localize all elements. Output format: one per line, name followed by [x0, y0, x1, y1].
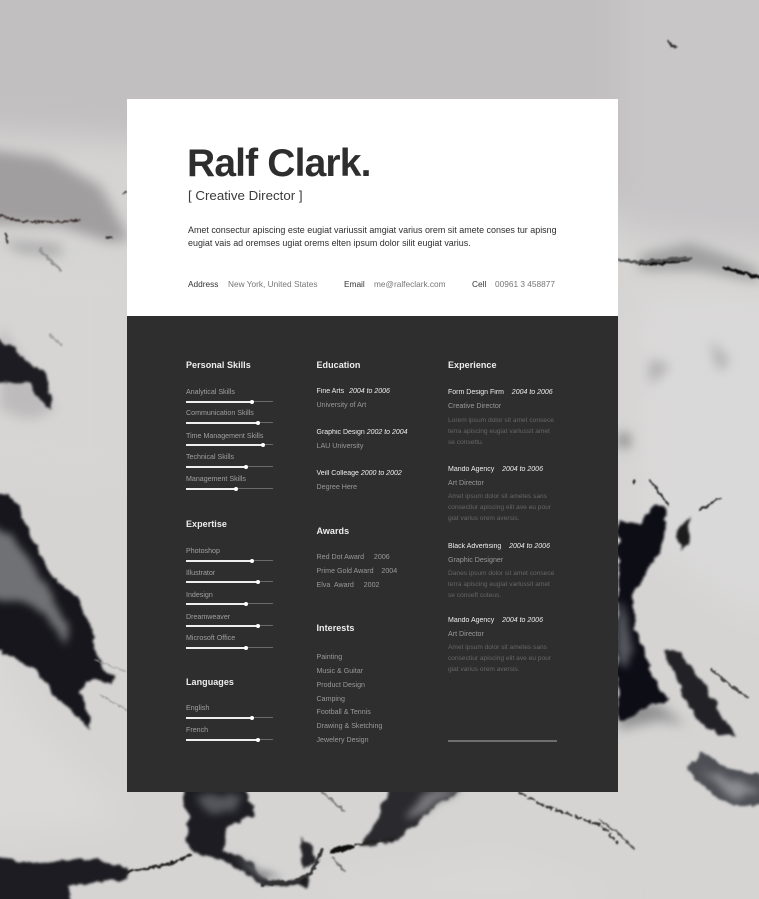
languages list: French — [186, 726, 208, 734]
expertise list: Microsoft Office — [186, 634, 235, 642]
heading: education: Education — [316, 360, 360, 370]
progress rule — [448, 740, 557, 742]
skills list: Communication Skills — [186, 409, 254, 417]
name title: Ralf Clark. — [187, 142, 371, 185]
experience: mando agency: Amet ipsum dolor sit ametes sans consectiur apiscing elit ave eu pour giat varius orem aversis. — [448, 493, 551, 522]
heading: languages: Languages — [186, 677, 234, 687]
dark veins and blobs — [0, 333, 759, 899]
expertise list: Photoshop — [186, 547, 220, 555]
intro paragraph — [188, 225, 557, 248]
contact row: 00961 3 458877 — [495, 278, 555, 288]
interests list: Football & Tennis — [316, 708, 371, 716]
experience: form design firm: Form Design Firm 2004 to 2006 — [448, 389, 553, 396]
awards list: Prime Gold Award 2004 — [316, 567, 397, 575]
contact row: Email — [344, 278, 365, 288]
awards list: Elva Award 2002 — [316, 581, 379, 589]
skills list: Analytical Skills — [186, 388, 235, 396]
experience: mando agency — [448, 466, 551, 522]
expertise list: Dreamweaver — [186, 613, 230, 621]
education entries: Veill Colleage 2000 to 2002 — [316, 470, 402, 477]
experience: black advertising: Danes ipsum dolor sit amet consece terra apiscing eugiat varlussit amet se conseft cuteus. — [448, 570, 554, 599]
dark panel — [127, 316, 618, 792]
education entries: Fine Arts 2004 to 2006 — [316, 388, 390, 395]
header panel — [127, 99, 618, 316]
experience: black advertising: Black Advertising 2004 to 2006 — [448, 543, 550, 550]
heading: expertise: Expertise — [186, 519, 227, 529]
education entries: Degree Here — [316, 483, 357, 491]
interests list: Product Design — [316, 681, 365, 689]
experience: form design firm — [448, 389, 554, 446]
experience: mando agency 2: Amet ipsum dolor sit ametes sans consectiur apiscing elit ave eu pour giat varius orem aversis. — [448, 644, 551, 673]
education entries: Graphic Design 2002 to 2004 — [316, 429, 408, 436]
skills list: Management Skills — [186, 475, 246, 483]
experience: form design firm: Lorem ipsum dolor sit amet consece terra apiscing eugiat varlussit amet se consettu. — [448, 416, 554, 446]
job subtitle: [ Creative Director ] — [188, 188, 303, 203]
languages list — [186, 704, 209, 734]
skills list: Technical Skills — [186, 453, 234, 461]
intro paragraph: eugiat vais ad oremses ugiat orems elten ipsum dolor silit eugiat varius. — [188, 238, 471, 248]
interests list: Camping — [316, 695, 345, 703]
education entries: University of Art — [316, 401, 366, 409]
interests list: Music & Guitar — [316, 667, 363, 675]
awards list: Red Dot Award 2006 — [316, 553, 390, 561]
heading: experience: Experience — [448, 360, 497, 370]
experience: mando agency 2: Art Director — [448, 630, 484, 638]
contact row: New York, United States — [228, 278, 317, 288]
heading: personal skills: Personal Skills — [186, 360, 251, 370]
experience: mando agency 2: Mando Agency 2004 to 2006 — [448, 617, 543, 624]
experience: black advertising — [448, 543, 554, 599]
contact row: me@ralfeclark.com — [374, 278, 446, 288]
skills list: Time Management Skills — [186, 432, 263, 440]
interests list: Jewelery Design — [316, 736, 369, 744]
experience: black advertising: Graphic Designer — [448, 556, 503, 564]
education entries: LAU University — [316, 442, 363, 450]
education entries — [316, 388, 408, 491]
experience: mando agency: Art Director — [448, 479, 484, 487]
soft grey clouds — [0, 148, 759, 730]
interests list — [316, 653, 382, 744]
interests list: Painting — [316, 653, 342, 661]
experience: form design firm: Creative Director — [448, 402, 501, 410]
awards list — [316, 553, 397, 589]
heading: interests: Interests — [316, 623, 354, 633]
interests list: Drawing & Sketching — [316, 722, 382, 730]
expertise list: Indesign — [186, 591, 213, 599]
skills list — [186, 388, 264, 483]
expertise list: Illustrator — [186, 569, 215, 577]
contact row: Cell — [472, 278, 486, 288]
mottled blob interiors — [0, 520, 759, 878]
experience: mando agency: Mando Agency 2004 to 2006 — [448, 466, 543, 473]
expertise list — [186, 547, 235, 642]
heading: awards: Awards — [316, 526, 349, 536]
contact row: Address — [188, 278, 218, 288]
languages list: English — [186, 704, 209, 712]
contact row — [188, 278, 555, 288]
experience: mando agency 2 — [448, 617, 551, 673]
intro paragraph: Amet consectur apiscing este eugiat variussit amgiat varius orem sit amete conses tur apisng — [188, 225, 557, 235]
